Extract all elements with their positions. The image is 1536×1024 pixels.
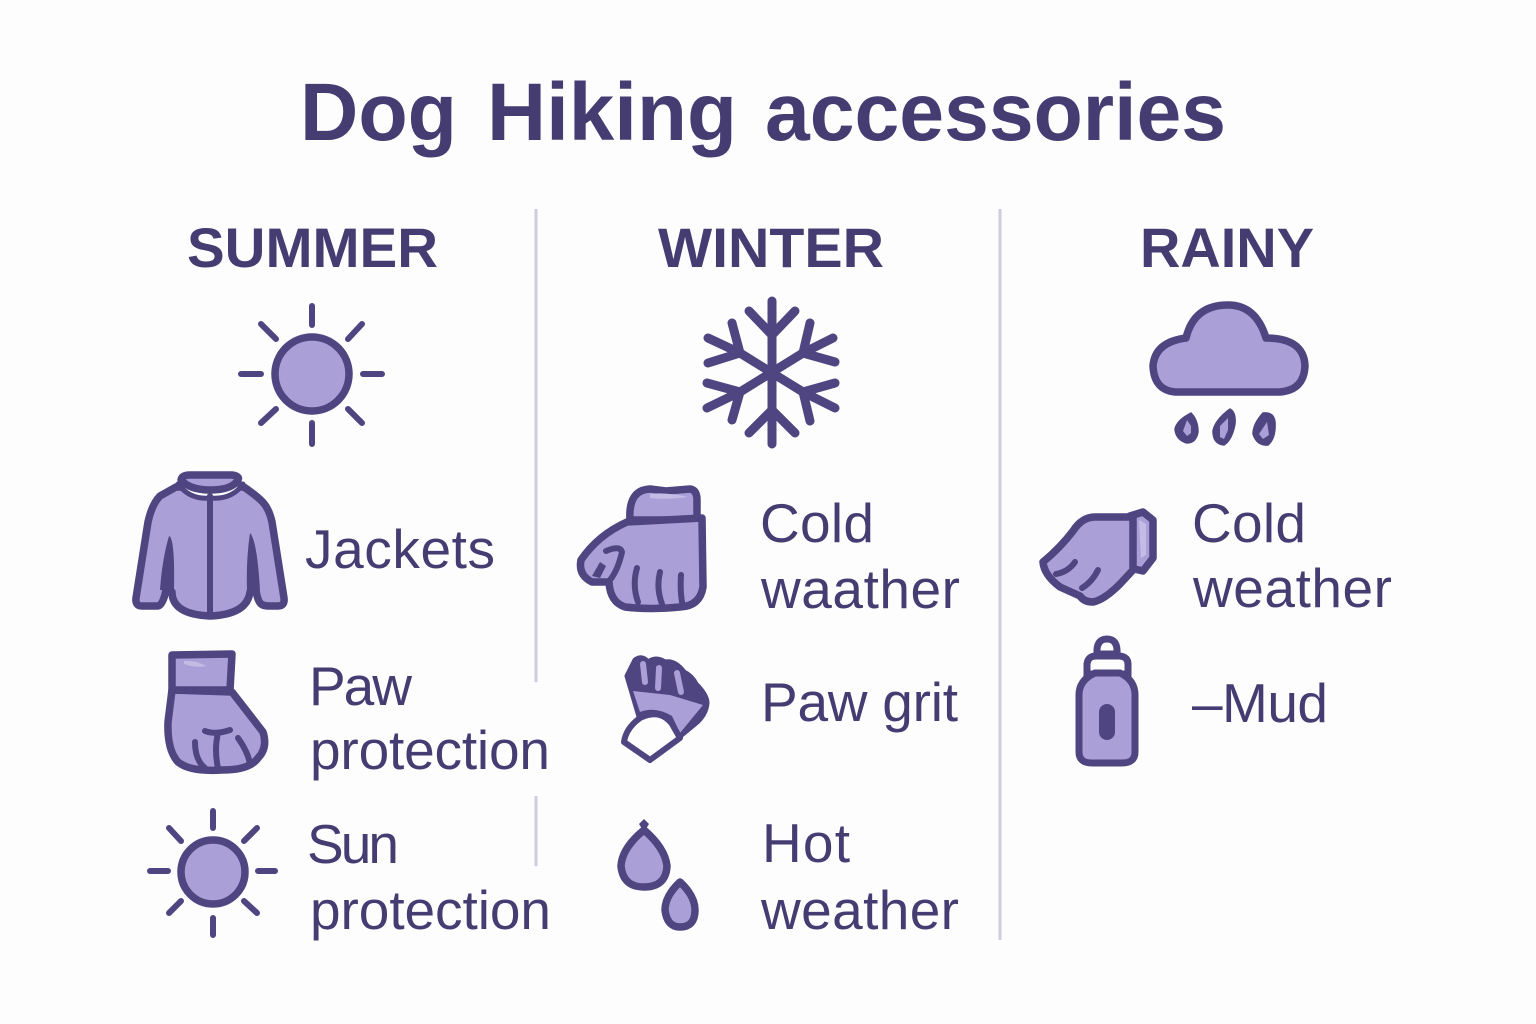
label: cold waather: waather (760, 558, 960, 620)
icon: winter mitt (580, 489, 703, 608)
icon: large sun (241, 306, 382, 444)
panel: winter (580, 216, 960, 941)
label: cold weather (1192, 492, 1392, 619)
label: cold weather: Cold (1192, 492, 1306, 554)
label: cold weather: weather (1192, 557, 1392, 619)
icon: small sun (150, 811, 275, 935)
panel: rainy (1043, 216, 1392, 763)
icon: snowflake (707, 301, 835, 444)
icon: bottle (1079, 639, 1135, 763)
icon: paw grip (624, 658, 707, 760)
heading: winter: WINTER (658, 216, 884, 279)
title: accessories (765, 67, 1226, 158)
title (300, 67, 1226, 158)
label: cold waather (760, 492, 960, 620)
title: Hiking (487, 67, 737, 158)
label: hot weather (760, 812, 959, 941)
icon: rain mitt (1043, 512, 1153, 602)
label: sun protection (307, 813, 551, 941)
label: cold waather: Cold (760, 492, 874, 554)
title: Dog (300, 67, 457, 158)
label: hot weather: weather (760, 879, 959, 941)
icon: paw boot (168, 654, 265, 770)
label: jackets: Jackets (305, 518, 495, 580)
label: sun protection: Sun (307, 813, 399, 875)
label: paw grit: Paw grit (761, 671, 958, 733)
label: sun protection: protection (310, 879, 551, 941)
panel: summer (136, 216, 551, 941)
heading: rainy: RAINY (1140, 216, 1314, 279)
label: paw protection: protection (310, 719, 550, 781)
label: paw protection: Paw (309, 655, 412, 717)
heading: summer: SUMMER (187, 216, 438, 279)
icon: water drops (621, 819, 695, 927)
label: hot weather: Hot (762, 812, 850, 874)
label: mud: –Mud (1192, 672, 1328, 734)
icon: rain cloud (1153, 305, 1305, 445)
icon: jacket (136, 475, 284, 616)
label: paw protection (309, 655, 550, 781)
